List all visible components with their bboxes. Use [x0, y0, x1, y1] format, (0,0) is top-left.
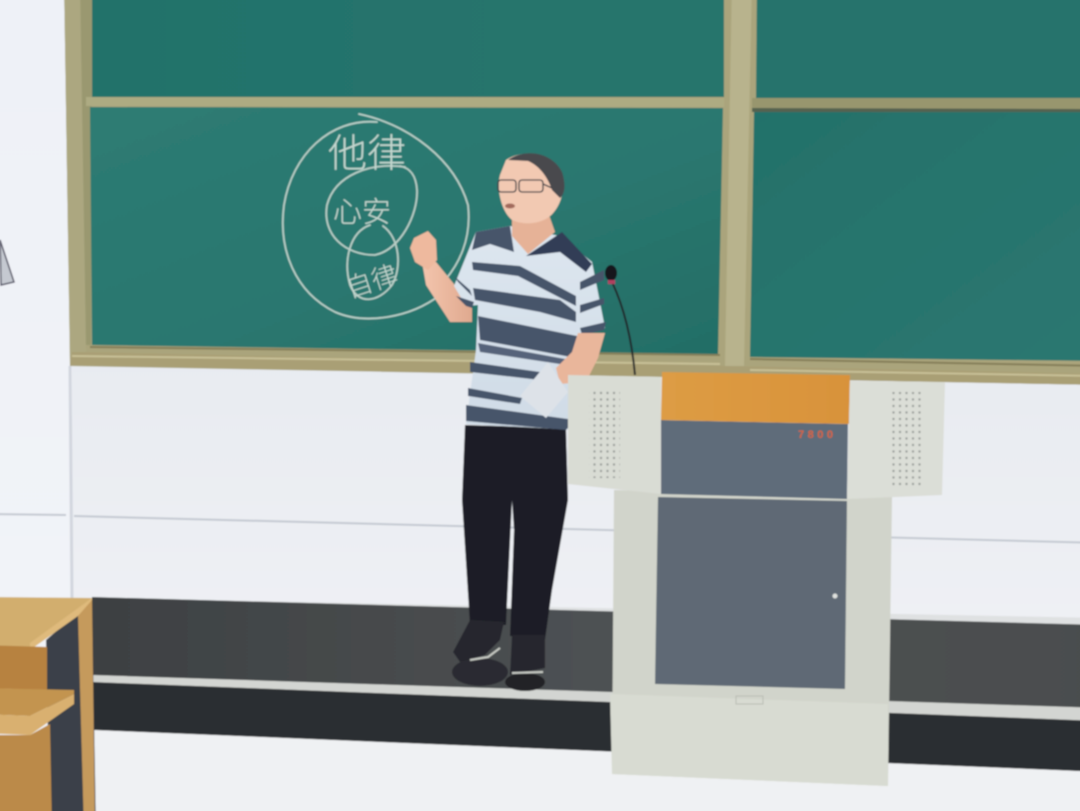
glasses	[498, 180, 552, 192]
neck	[512, 212, 555, 254]
chalk diagram	[283, 114, 469, 318]
lower circle	[347, 225, 398, 299]
right chalkboard	[750, 0, 1080, 361]
lectern door	[655, 497, 847, 689]
label: 心安: 心安	[333, 189, 391, 231]
hair	[508, 153, 564, 198]
microphone	[605, 265, 635, 375]
head	[499, 154, 563, 223]
shadow on stage	[452, 658, 508, 686]
left chalkboard	[86, 0, 724, 354]
shoes	[453, 620, 504, 662]
wooden desk	[0, 597, 96, 811]
floor	[92, 730, 1080, 811]
stage floor	[92, 597, 1080, 772]
right speaker	[847, 381, 945, 499]
label: 他律: 他律	[328, 123, 406, 179]
chalkboard frame	[64, 0, 1080, 385]
raised fist	[410, 231, 437, 270]
outer circle	[283, 114, 469, 318]
lectern top panel	[661, 420, 848, 499]
inner circle	[326, 166, 417, 255]
lecturer	[410, 153, 606, 691]
wall panels	[0, 240, 1080, 628]
lectern base	[612, 490, 892, 786]
orange wood top	[661, 372, 850, 424]
shirt	[454, 226, 605, 430]
forearm and hand	[556, 333, 605, 384]
raised arm	[422, 262, 472, 322]
trousers	[462, 425, 568, 640]
left speaker	[568, 375, 661, 494]
mouth	[505, 204, 515, 208]
logo: 7800	[798, 429, 833, 441]
lectern	[568, 372, 945, 786]
paper	[520, 362, 568, 418]
label: 自律: 自律	[341, 254, 402, 306]
